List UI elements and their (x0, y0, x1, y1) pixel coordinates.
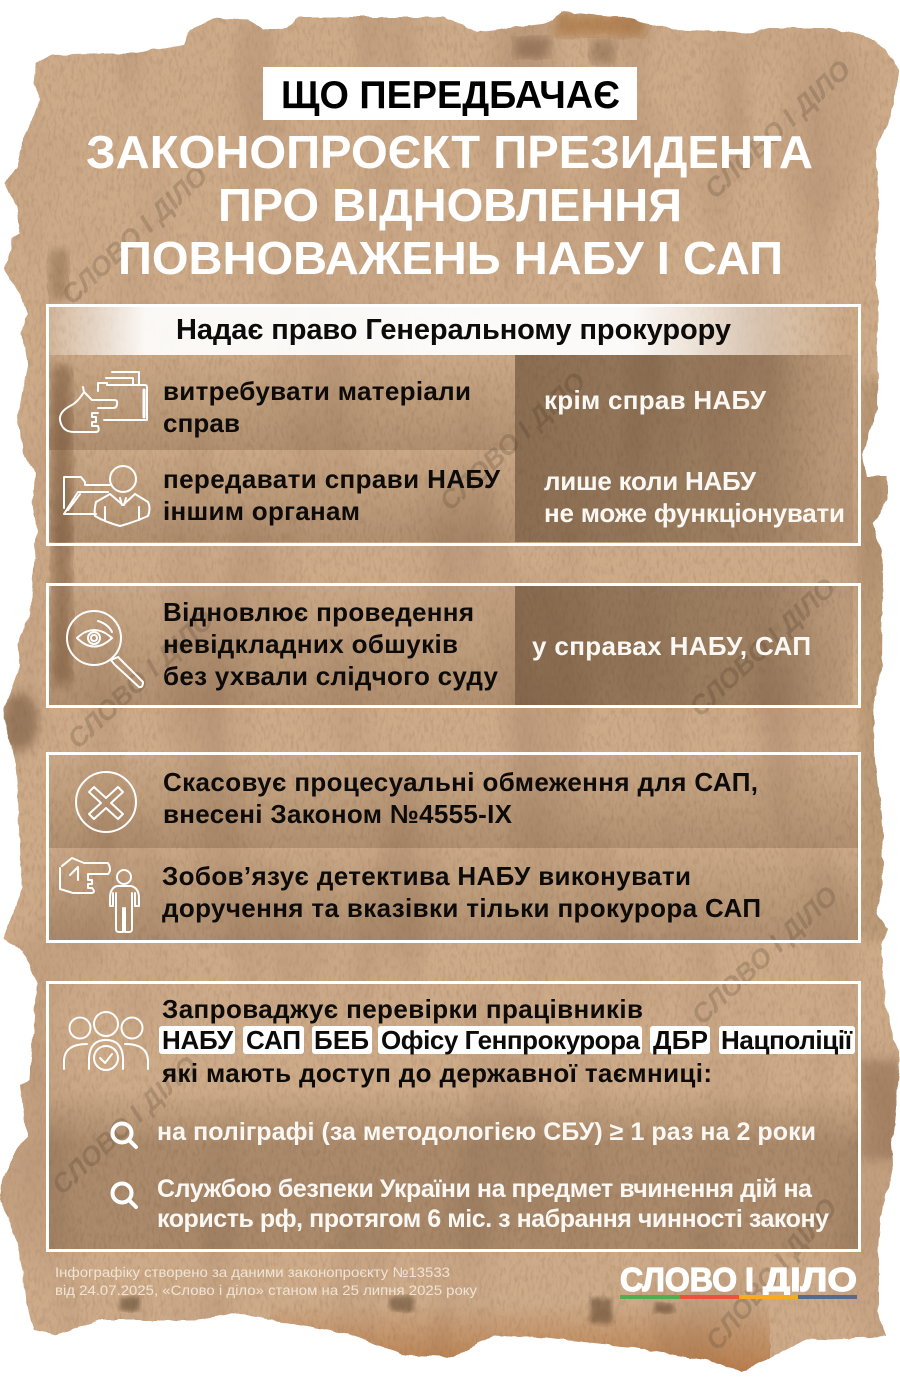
watermarks: СЛОВО І ДІЛО (684, 572, 842, 722)
title: ПОВНОВАЖЕНЬ НАБУ І САП (118, 232, 783, 284)
row 1 text: витребувати матеріали (163, 376, 471, 406)
checks heading: Запроваджує перевірки працівників (162, 994, 643, 1024)
row 1 text (163, 376, 471, 438)
title: ЗАКОНОПРОЄКТ ПРЕЗИДЕНТА (86, 126, 813, 178)
agency chips: САП (246, 1025, 301, 1055)
SBU text: Службою безпеки України на предмет вчинення дій на (157, 1175, 813, 1203)
row 2 text: передавати справи НАБУ (163, 464, 501, 494)
icon: search 1 (112, 1124, 136, 1147)
icon: cross in circle (76, 772, 136, 832)
searches text: без ухвали слідчого суду (163, 661, 499, 691)
agency chips: Нацполіції (721, 1025, 853, 1055)
row 2 exception: лише коли НАБУ (544, 466, 757, 496)
title badge: ЩО ПЕРЕДБАЧАЄ (281, 74, 620, 117)
icon: search 2 (112, 1184, 136, 1207)
row 2 exception (544, 466, 845, 528)
secret access text: які мають доступ до державної таємниці: (161, 1058, 712, 1088)
restrictions text (163, 767, 758, 829)
agency chips: БЕБ (314, 1025, 369, 1055)
detectives text: Зобов’язує детектива НАБУ виконувати (162, 861, 691, 891)
row 2 text (163, 464, 501, 526)
icon: hand with folder (60, 372, 147, 432)
watermarks: СЛОВО І ДІЛО (46, 1050, 204, 1200)
icon: magnifier with eye (67, 611, 143, 687)
watermarks: СЛОВО І ДІЛО (434, 366, 592, 516)
SBU text (157, 1175, 829, 1233)
watermarks: СЛОВО І ДІЛО (686, 880, 844, 1030)
searches text: Відновлює проведення (163, 597, 474, 627)
panel heading: Надає право Генеральному прокурору (176, 314, 731, 346)
icon: pointing hand and person (60, 858, 139, 932)
searches text: невідкладних обшуків (163, 629, 458, 659)
panel: urgent searches (48, 584, 860, 706)
row 2 exception: не може функціонувати (544, 498, 845, 528)
logo (620, 1261, 857, 1299)
restrictions text: внесені Законом №4555-ІХ (163, 799, 513, 829)
source note (55, 1264, 477, 1298)
panel: SAP restrictions and detectives (48, 754, 860, 942)
searches text (163, 597, 499, 691)
source note: Інфографіку створено за даними законопроєкту №13533 (55, 1264, 450, 1280)
logo: І (745, 1261, 754, 1298)
agency chips: Офісу Генпрокурора (381, 1025, 641, 1055)
icon: folder and official (64, 466, 150, 526)
detectives text: доручення та вказівки тільки прокурора САП (162, 893, 761, 923)
panel: Prosecutor General powers (48, 306, 860, 544)
detectives text (162, 861, 761, 923)
title: ПРО ВІДНОВЛЕННЯ (218, 179, 682, 231)
title (86, 126, 813, 284)
row 1 exception: крім справ НАБУ (544, 385, 767, 415)
searches scope: у справах НАБУ, САП (532, 631, 811, 661)
SBU text: користь рф, протягом 6 міс. з набрання чинності закону (157, 1205, 829, 1233)
watermarks: СЛОВО І ДІЛО (62, 604, 220, 754)
panel: staff checks (48, 982, 860, 1250)
restrictions text: Скасовує процесуальні обмеження для САП, (163, 767, 758, 797)
logo: ДІЛО (763, 1261, 857, 1298)
logo: СЛОВО (620, 1261, 737, 1298)
agency chips: НАБУ (162, 1025, 234, 1055)
agency chips: ДБР (653, 1025, 708, 1055)
row 1 text: справ (163, 408, 240, 438)
icon: people with check mark (64, 1012, 148, 1070)
watermarks: СЛОВО І ДІЛО (700, 1193, 843, 1356)
agency chips (159, 1025, 855, 1055)
watermarks: СЛОВО І ДІЛО (699, 54, 857, 204)
source note: від 24.07.2025, «Слово і діло» станом на 25 липня 2025 року (55, 1282, 477, 1298)
watermarks: СЛОВО І ДІЛО (56, 160, 214, 310)
row 2 text: іншим органам (163, 496, 360, 526)
polygraph text: на поліграфі (за методологією СБУ) ≥ 1 раз на 2 роки (157, 1118, 816, 1146)
